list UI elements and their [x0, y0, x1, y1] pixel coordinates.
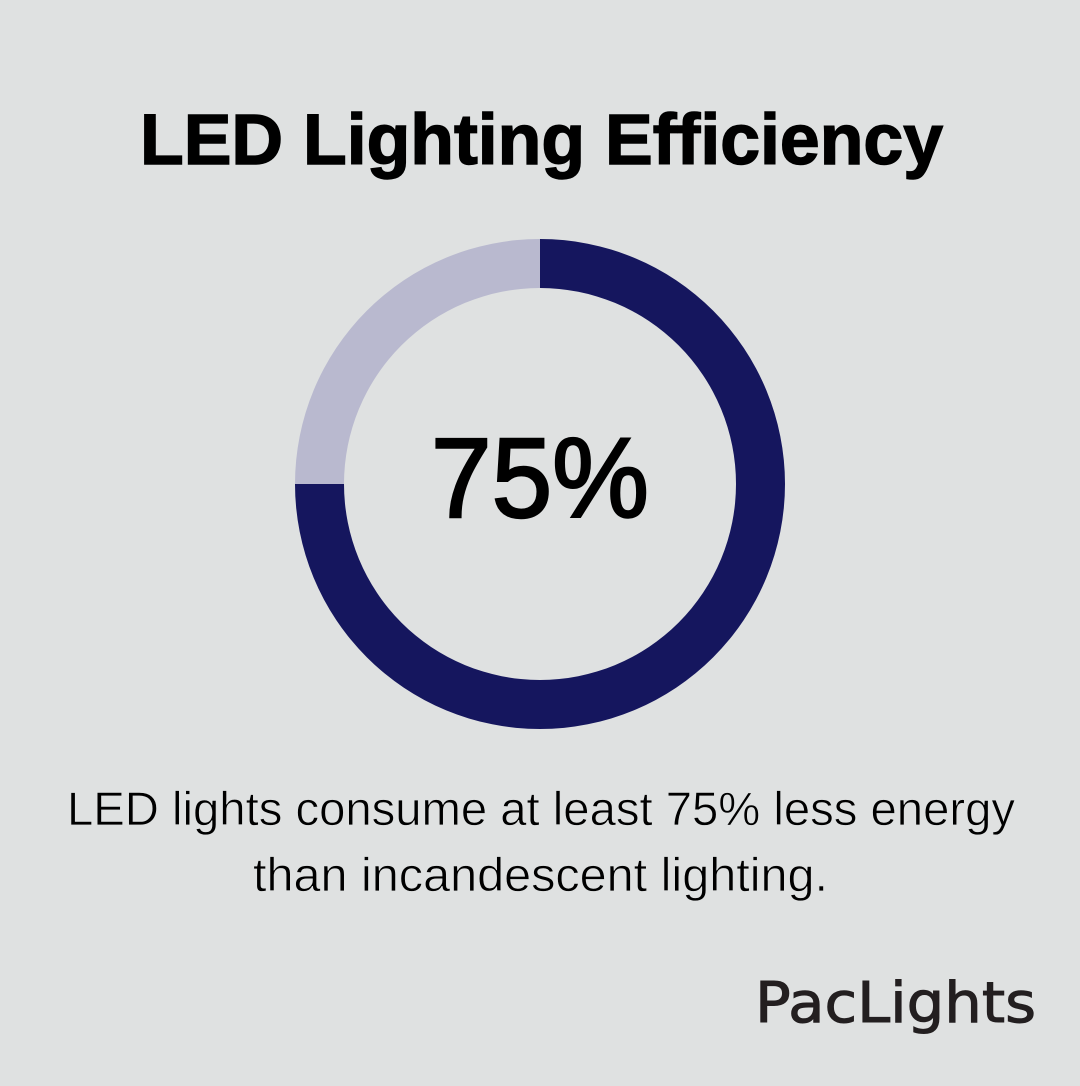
logo: PacLights: PacLights — [755, 971, 1036, 1036]
title: LED Lighting Efficiency — [140, 101, 944, 180]
description text: LED lights consume at least 75% less energy — [67, 782, 1015, 835]
description text — [67, 782, 1015, 901]
donut chart: 75% — [295, 239, 785, 729]
ring segment: 75% — [295, 239, 785, 729]
description text: than incandescent lighting. — [253, 848, 828, 901]
center value: 75% — [431, 415, 649, 541]
ring segment: remaining 25% — [295, 239, 540, 484]
